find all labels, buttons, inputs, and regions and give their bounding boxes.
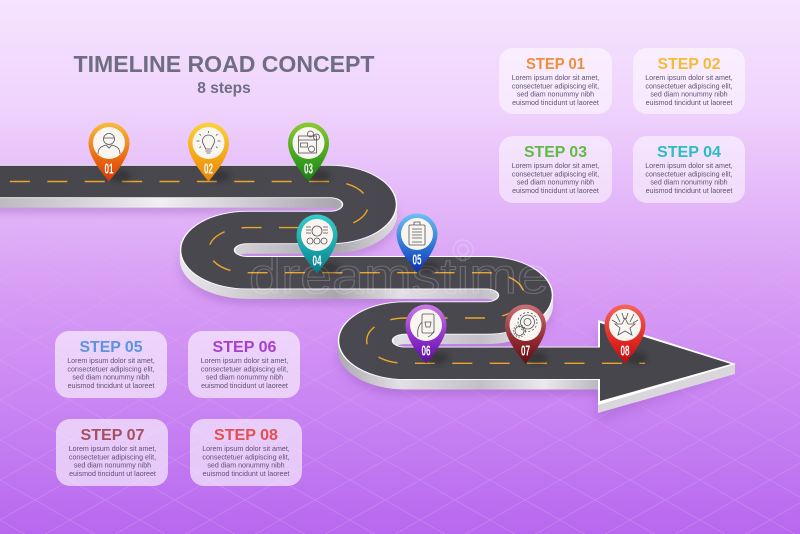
icon: toolkit xyxy=(298,131,320,153)
card: step 02: Lorem ipsum dolor sit amet, xyxy=(645,74,733,82)
card: step 02: euismod tincidunt ut laoreet xyxy=(646,99,732,107)
card: step 04: consectetuer adipiscing elit, xyxy=(645,170,733,178)
card: step 03: consectetuer adipiscing elit, xyxy=(512,170,599,178)
icon: person xyxy=(98,134,120,154)
pin 05: 05 xyxy=(412,252,422,268)
icon: light bulb xyxy=(196,131,220,153)
pin 04: 04 xyxy=(312,252,322,270)
card: step 07: consectetuer adipiscing elit, xyxy=(69,454,156,462)
card: step 01: euismod tincidunt ut laoreet xyxy=(512,99,599,107)
pin 01 xyxy=(88,122,131,182)
card: step 06: Lorem ipsum dolor sit amet, xyxy=(201,357,288,365)
pin 08: 08 xyxy=(620,342,630,360)
card: step 02: sed diam nonummy nibh xyxy=(650,91,728,99)
card: step 05: STEP 05 xyxy=(80,339,143,356)
card: step 05: sed diam nonummy nibh xyxy=(72,374,150,382)
pin 03: 03 xyxy=(304,160,313,178)
card: step 07: sed diam nonummy nibh xyxy=(74,462,151,470)
card: step 03: STEP 03 xyxy=(524,144,587,161)
icon: clipboard xyxy=(409,222,425,245)
card: step 01: sed diam nonummy nibh xyxy=(517,91,594,99)
card: step 01: Lorem ipsum dolor sit amet, xyxy=(512,74,599,82)
card: step 06: STEP 06 xyxy=(212,339,277,356)
card: step 01: STEP 01 xyxy=(526,56,585,73)
pin 06 xyxy=(406,304,448,364)
card: step 02: STEP 02 xyxy=(658,56,720,73)
watermark: dreamstime xyxy=(249,248,549,304)
road xyxy=(0,182,736,422)
pin 06: 06 xyxy=(422,342,430,360)
card: step 07: euismod tincidunt ut laoreet xyxy=(69,470,156,478)
card: step 05: consectetuer adipiscing elit, xyxy=(67,366,155,374)
card: step 08: euismod tincidunt ut laoreet xyxy=(203,470,289,478)
pin 08 xyxy=(604,304,647,364)
card: step 01 xyxy=(499,48,612,114)
pin 02 xyxy=(188,122,230,182)
card: step 03: euismod tincidunt ut laoreet xyxy=(512,187,599,195)
card: step 06 xyxy=(188,331,300,398)
card: step 04: sed diam nonummy nibh xyxy=(650,179,728,187)
card: step 08: sed diam nonummy nibh xyxy=(207,462,285,470)
pin 03 xyxy=(288,122,330,182)
card: step 05: Lorem ipsum dolor sit amet, xyxy=(67,357,155,365)
card: step 04: euismod tincidunt ut laoreet xyxy=(646,187,732,195)
icon: star xyxy=(612,313,638,335)
card: step 06: consectetuer adipiscing elit, xyxy=(201,366,288,374)
card: step 08 xyxy=(190,419,302,486)
pin 04 xyxy=(296,214,339,274)
pin 05 xyxy=(396,213,439,273)
card: step 05: euismod tincidunt ut laoreet xyxy=(68,382,154,390)
icon: process xyxy=(306,226,328,244)
card: step 03: Lorem ipsum dolor sit amet, xyxy=(512,162,599,170)
card: step 07: STEP 07 xyxy=(80,427,144,444)
card: step 02 xyxy=(633,48,745,114)
card: step 01: consectetuer adipiscing elit, xyxy=(512,82,599,90)
icon: gears xyxy=(514,312,537,337)
card: step 03 xyxy=(499,136,612,203)
card: step 08: Lorem ipsum dolor sit amet, xyxy=(202,445,290,453)
pin 01: 01 xyxy=(104,160,114,178)
pin 02: 02 xyxy=(204,160,213,178)
card: step 07: Lorem ipsum dolor sit amet, xyxy=(69,445,156,453)
card: step 08: consectetuer adipiscing elit, xyxy=(202,454,290,462)
card: step 08: STEP 08 xyxy=(214,427,278,444)
card: step 04 xyxy=(633,136,745,203)
card: step 07 xyxy=(56,419,168,486)
card: step 05 xyxy=(55,331,167,398)
card: step 06: euismod tincidunt ut laoreet xyxy=(201,382,288,390)
subtitle: 8 steps xyxy=(197,80,251,97)
card: step 03: sed diam nonummy nibh xyxy=(517,179,594,187)
title: TIMELINE ROAD CONCEPT xyxy=(74,51,374,77)
icon: phone in hand xyxy=(418,314,434,337)
card: step 04: Lorem ipsum dolor sit amet, xyxy=(645,162,733,170)
card: step 02: consectetuer adipiscing elit, xyxy=(645,82,733,90)
pin 07 xyxy=(505,304,548,364)
card: step 06: sed diam nonummy nibh xyxy=(206,374,283,382)
pin 07: 07 xyxy=(521,342,530,360)
card: step 04: STEP 04 xyxy=(657,144,721,161)
